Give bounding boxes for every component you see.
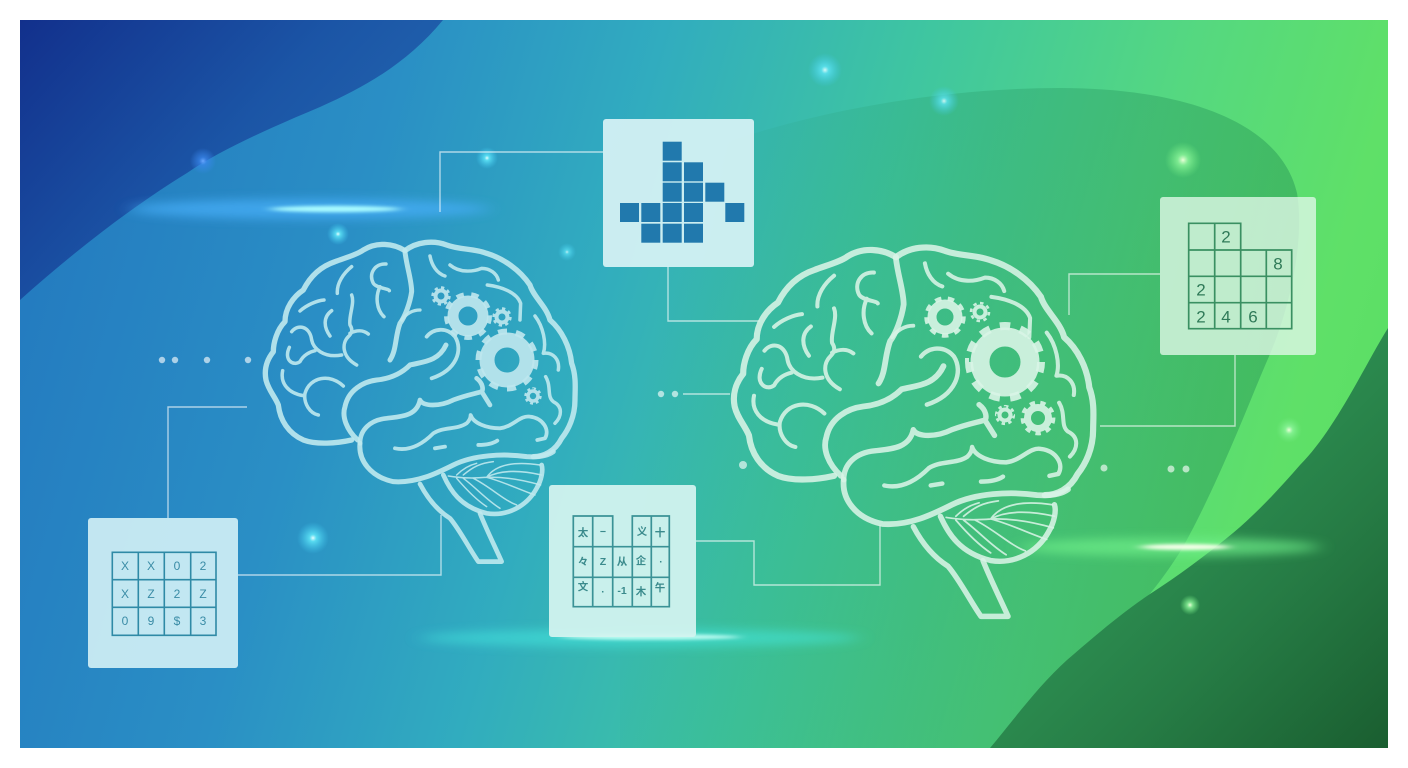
centre grid symbols: Z: [600, 556, 607, 568]
right grid values: 6: [1248, 308, 1258, 326]
card: left number grid: [88, 518, 238, 668]
centre grid symbols: 太: [578, 526, 589, 539]
centre grid lines: [573, 516, 669, 607]
centre grid symbols: ·: [601, 586, 605, 598]
card: right sudoku grid: [1160, 197, 1316, 355]
light streak: bottom centre: [420, 629, 860, 647]
centre grid symbols: 企: [636, 554, 647, 567]
left grid values: $: [174, 614, 181, 628]
left grid lines: [112, 552, 216, 635]
centre grid symbols: 々: [578, 556, 588, 568]
left brain: [265, 242, 575, 562]
centre grid symbols: 义: [637, 526, 648, 538]
centre grid symbols: −: [600, 526, 606, 538]
left grid values: Z: [147, 587, 155, 601]
right grid values: 8: [1273, 254, 1283, 274]
left grid values: 2: [200, 559, 207, 573]
light streak: upper left: [130, 199, 490, 219]
card: centre symbol grid: [549, 485, 696, 637]
left grid values: 0: [174, 559, 181, 573]
centre grid symbols: 从: [617, 556, 628, 568]
glowing particles: [190, 53, 1302, 615]
left grid values: [121, 559, 207, 628]
left grid values: X: [121, 587, 129, 601]
left brain gears: [432, 288, 541, 404]
centre grid symbols: ·: [659, 556, 663, 568]
right grid lines: [1189, 223, 1292, 329]
right grid values: 2: [1221, 228, 1231, 246]
left grid values: 0: [122, 614, 129, 628]
right brain: [734, 247, 1093, 616]
centre grid symbols: 文: [578, 580, 589, 593]
left grid values: X: [147, 559, 155, 573]
right grid values: [1196, 228, 1283, 326]
right brain gears: [926, 298, 1054, 434]
left grid values: X: [121, 559, 129, 573]
white dots: [159, 357, 1189, 472]
left grid values: 2: [174, 587, 181, 601]
right grid values: 2: [1196, 308, 1206, 326]
mid green wave overlay: [719, 88, 1298, 748]
centre grid symbols: -1: [617, 585, 627, 597]
dark green lower right wave: [990, 328, 1388, 748]
centre grid symbols: 木: [636, 585, 647, 598]
right grid values: 2: [1196, 280, 1206, 300]
centre grid symbols: 午: [655, 581, 665, 594]
left grid values: Z: [199, 587, 207, 601]
light streak: right: [1020, 538, 1320, 556]
pixel block chart: [620, 142, 744, 243]
card: top pixel blocks: [603, 119, 754, 267]
navy top left wave: [20, 20, 443, 300]
centre grid symbols: [578, 526, 666, 598]
right grid values: 4: [1221, 308, 1231, 326]
left grid values: 3: [200, 614, 207, 628]
connector lines: [168, 152, 1235, 585]
centre grid symbols: 十: [655, 526, 666, 539]
left grid values: 9: [148, 614, 155, 628]
